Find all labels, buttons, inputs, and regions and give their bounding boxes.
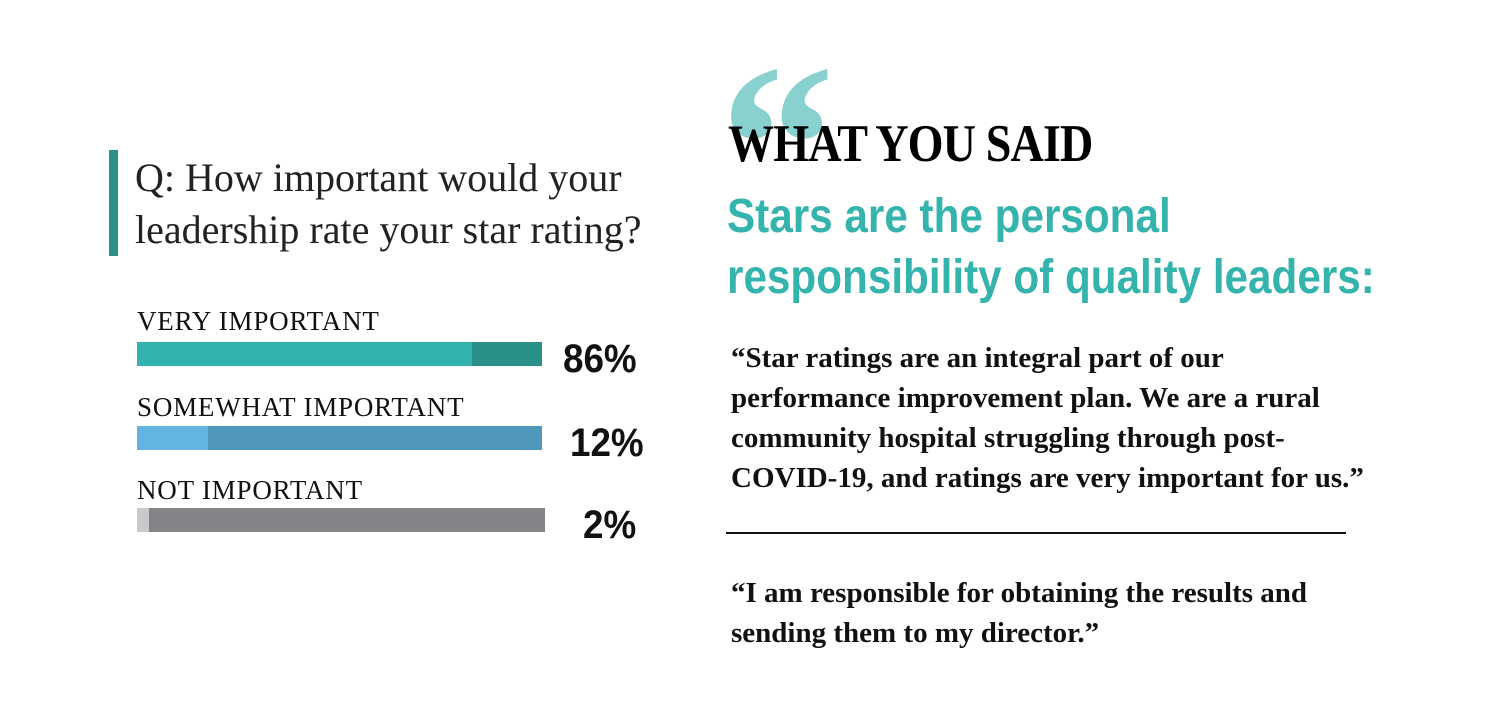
accent bar: [109, 150, 118, 256]
value: 86%: 86%: [563, 337, 637, 381]
quote 1: performance improvement plan. We are a rural: [731, 382, 1320, 414]
title: WHAT YOU SAID: [728, 115, 1092, 173]
value: 12%: 12%: [570, 421, 644, 465]
question block: [109, 150, 641, 256]
bar: somewhat important: [137, 426, 542, 450]
question text: Q: How important would your: [135, 155, 622, 200]
quote 2: [731, 577, 1307, 649]
question text: [135, 155, 641, 252]
label: somewhat important: SOMEWHAT IMPORTANT: [137, 392, 464, 422]
bar: not important: [137, 508, 545, 532]
bar chart: [137, 306, 644, 547]
quote 1: COVID-19, and ratings are very important for us.”: [731, 462, 1364, 494]
subheading: [727, 190, 1375, 304]
divider: [726, 532, 1346, 534]
label: not important: NOT IMPORTANT: [137, 475, 363, 505]
label: very important: VERY IMPORTANT: [137, 306, 380, 336]
subheading: Stars are the personal: [727, 190, 1171, 243]
quote 1: [731, 342, 1364, 494]
quote 2: sending them to my director.”: [731, 617, 1099, 649]
quote 1: “Star ratings are an integral part of our: [731, 342, 1224, 374]
bar: very important: [137, 342, 542, 366]
quote 1: community hospital struggling through post-: [731, 422, 1285, 454]
quote 2: “I am responsible for obtaining the results and: [731, 577, 1307, 609]
subheading: responsibility of quality leaders:: [727, 251, 1375, 304]
value: 2%: 2%: [583, 503, 636, 547]
question text: leadership rate your star rating?: [135, 207, 641, 252]
